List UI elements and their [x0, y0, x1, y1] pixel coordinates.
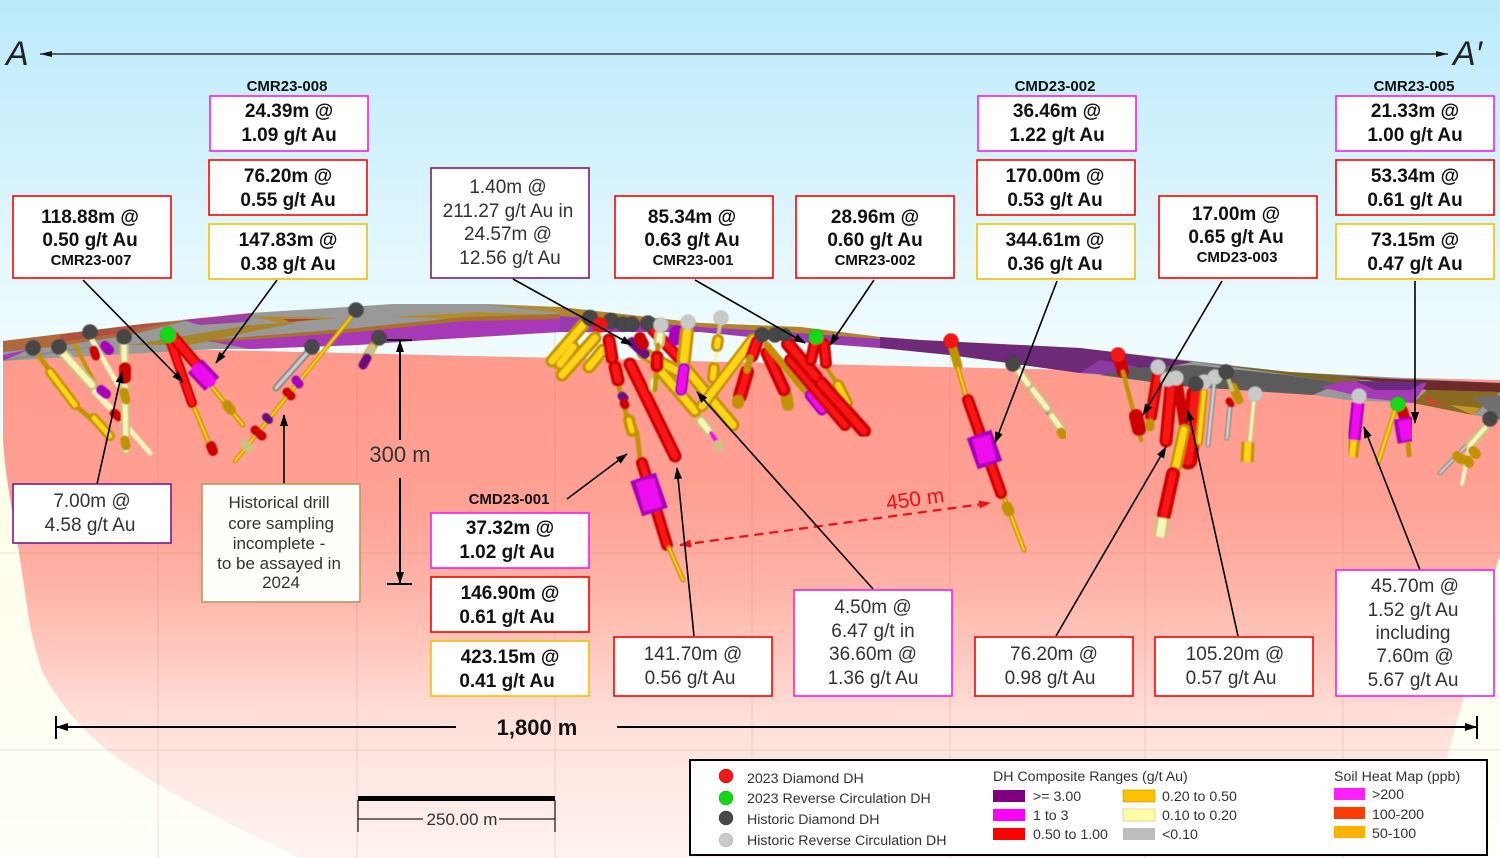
note: historical sampling: 2024	[262, 573, 300, 592]
horizontal scale: 1,800 m	[56, 715, 1477, 740]
callout group: CMR23-008: 147.83m @	[239, 230, 337, 251]
drill hole: CMD23-002	[944, 334, 1024, 550]
callout group: CMR23-008	[209, 78, 368, 279]
callout: CMR23-001	[615, 196, 773, 278]
callout: CMR23-007	[13, 196, 171, 278]
callout: 4.50m: 4.50m @	[834, 597, 912, 618]
legend: DH composite ranges: 0.20 to 0.50	[1162, 789, 1237, 805]
drill holes: CMR23-005 cluster	[1352, 388, 1409, 463]
note: historical sampling: to be assayed in	[217, 554, 341, 573]
section line A to A'	[4, 35, 1484, 73]
callout: 1.40m high grade: 211.27 g/t Au in	[443, 201, 573, 222]
callout: 45.70m: including	[1376, 623, 1450, 644]
callout: CMD23-003: 17.00m @	[1192, 204, 1280, 225]
callout group: CMR23-005: 53.34m @	[1371, 166, 1459, 187]
callout: 7.00m: 4.58 g/t Au	[45, 515, 135, 536]
callout group: CMD23-002: 36.46m @	[1013, 101, 1101, 122]
sky background	[0, 0, 1500, 435]
callout: CMR23-007: 118.88m @	[41, 207, 139, 228]
callout: 7.00m	[13, 484, 171, 543]
callout: 45.70m: 5.67 g/t Au	[1368, 670, 1458, 691]
callout group: CMR23-005: 73.15m @	[1371, 230, 1459, 251]
note: historical sampling: incomplete -	[233, 534, 325, 553]
callout group: CMD23-001: 1.02 g/t Au	[459, 542, 555, 563]
scale bar: 250.00 m: 250.00 m	[427, 810, 497, 829]
note: historical sampling	[202, 484, 360, 602]
legend: drill hole types: 2023 Diamond DH	[747, 771, 864, 787]
callout group: CMD23-002: 0.36 g/t Au	[1007, 254, 1103, 275]
drill hole: historic low-grade east of CMD23-002	[1006, 356, 1063, 435]
callout: CMR23-002: CMR23-002	[835, 252, 915, 269]
callout: CMR23-001: 0.63 g/t Au	[644, 230, 740, 251]
vertical scale: 300 m: 300 m	[369, 442, 431, 467]
callout: CMR23-001: CMR23-001	[653, 252, 733, 269]
pale outer background	[0, 435, 1500, 858]
callout group: CMR23-008: 0.55 g/t Au	[240, 190, 336, 211]
legend: drill hole types	[719, 769, 946, 849]
legend: soil heat map: 50-100	[1372, 826, 1416, 842]
callout: CMD23-003: CMD23-003	[1197, 249, 1277, 266]
callout group: CMD23-002	[977, 78, 1136, 279]
callout group: CMR23-005: CMR23-005	[1374, 78, 1454, 95]
drill holes: CMR23-007 and CMR23-008	[160, 327, 243, 451]
callout group: CMD23-001: CMD23-001	[469, 491, 549, 508]
callout: 45.70m: 45.70m @	[1371, 576, 1459, 597]
callout group: CMR23-008: 0.38 g/t Au	[240, 254, 336, 275]
callout: 105.20m: 0.57 g/t Au	[1186, 668, 1276, 689]
callout group: CMR23-008: 76.20m @	[244, 166, 332, 187]
callout: 141.70m: 0.56 g/t Au	[645, 668, 735, 689]
callout group: CMD23-002: CMD23-002	[1015, 78, 1095, 95]
callout: 141.70m: 141.70m @	[644, 644, 742, 665]
callout: 105.20m: 105.20m @	[1186, 644, 1284, 665]
callout: 45.70m	[1336, 570, 1494, 696]
callout group: CMR23-008: CMR23-008	[247, 78, 327, 95]
callout: CMR23-002: 0.60 g/t Au	[827, 230, 923, 251]
callout group: CMD23-002: 170.00m @	[1006, 166, 1104, 187]
callout group: CMR23-005: 21.33m @	[1371, 101, 1459, 122]
callout: 4.50m: 36.60m @	[829, 644, 917, 665]
legend: DH composite ranges: <0.10	[1162, 827, 1198, 843]
distance marker: 450 m	[680, 484, 990, 545]
callout: 4.50m	[794, 590, 952, 696]
legend: DH composite ranges: 0.10 to 0.20	[1162, 808, 1237, 824]
callout group: CMD23-001: 423.15m @	[461, 647, 559, 668]
callout group: CMD23-001	[431, 491, 589, 696]
distance marker: 450 m: 450 m	[885, 484, 946, 515]
callout group: CMR23-005	[1336, 78, 1494, 279]
callout: 1.40m high grade: 24.57m @	[464, 224, 552, 245]
callout: 76.20m: 0.98 g/t Au	[1005, 668, 1095, 689]
callout: 4.50m: 1.36 g/t Au	[828, 668, 918, 689]
callout group: CMR23-005: 1.00 g/t Au	[1367, 125, 1463, 146]
callout: 141.70m	[614, 637, 772, 696]
terrain surface band	[3, 304, 1500, 420]
legend: DH composite ranges: 0.50 to 1.00	[1033, 827, 1108, 843]
legend: DH composite ranges: DH Composite Ranges (g/t Au)	[993, 769, 1188, 785]
drill holes: CMR23-001 and CMR23-002 area	[702, 328, 864, 431]
callout: 1.40m high grade	[431, 168, 589, 278]
callout: CMD23-003: 0.65 g/t Au	[1188, 227, 1284, 248]
callout group: CMD23-001: 0.61 g/t Au	[459, 607, 555, 628]
callout group: CMD23-002: 0.53 g/t Au	[1007, 190, 1103, 211]
callout group: CMR23-008: 24.39m @	[245, 101, 333, 122]
callout: CMR23-001: 85.34m @	[648, 207, 736, 228]
drill holes: CMD23-003 cluster	[1110, 348, 1262, 537]
legend: DH composite ranges	[993, 769, 1237, 843]
vertical scale: 300 m	[369, 340, 431, 584]
callout group: CMD23-002: 1.22 g/t Au	[1009, 125, 1105, 146]
legend: drill hole types: 2023 Reverse Circulation DH	[747, 791, 931, 807]
callout arrows	[83, 279, 1420, 636]
drill holes: far-east cluster	[1440, 412, 1498, 484]
drill holes: central cluster	[552, 310, 733, 580]
section line A to A': A′	[1451, 35, 1484, 73]
note: historical sampling: Historical drill	[228, 493, 330, 512]
note: historical sampling: core sampling	[228, 514, 334, 533]
legend: soil heat map: 100-200	[1372, 807, 1424, 823]
section line A to A': A	[4, 35, 29, 73]
legend: drill hole types: Historic Diamond DH	[747, 812, 879, 828]
callout: CMD23-003	[1159, 196, 1317, 278]
callout group: CMR23-005: 0.61 g/t Au	[1367, 190, 1463, 211]
callout: 45.70m: 1.52 g/t Au	[1368, 600, 1458, 621]
callout group: CMR23-005: 0.47 g/t Au	[1367, 254, 1463, 275]
callout group: CMD23-001: 37.32m @	[466, 518, 554, 539]
callout group: CMD23-002: 344.61m @	[1006, 230, 1104, 251]
legend: soil heat map: >200	[1372, 787, 1404, 803]
callout: CMR23-007: CMR23-007	[51, 252, 131, 269]
pink subsurface block	[3, 345, 1500, 858]
callout: 76.20m: 76.20m @	[1010, 644, 1098, 665]
legend panel	[690, 760, 1487, 855]
callout: CMR23-002: 28.96m @	[831, 207, 919, 228]
callout: 1.40m high grade: 12.56 g/t Au	[459, 248, 561, 269]
legend: drill hole types: Historic Reverse Circulation DH	[747, 833, 946, 849]
callout: 105.20m	[1155, 637, 1313, 696]
callout: 4.50m: 6.47 g/t in	[831, 621, 915, 642]
legend: soil heat map: Soil Heat Map (ppb)	[1334, 769, 1460, 785]
callout group: CMD23-001: 146.90m @	[461, 583, 559, 604]
scale bar: 250.00 m	[358, 796, 555, 832]
drill holes: far-left cluster	[26, 324, 150, 453]
legend: DH composite ranges: 1 to 3	[1033, 808, 1069, 824]
callout: 45.70m: 7.60m @	[1376, 646, 1454, 667]
legend: soil heat map	[1334, 769, 1460, 842]
callout: 7.00m: 7.00m @	[53, 491, 131, 512]
callout: 1.40m high grade: 1.40m @	[469, 177, 547, 198]
legend: DH composite ranges: >= 3.00	[1033, 789, 1081, 805]
callout group: CMD23-001: 0.41 g/t Au	[459, 671, 555, 692]
callout group: CMR23-008: 1.09 g/t Au	[241, 125, 337, 146]
callout: CMR23-002	[796, 196, 954, 278]
drill holes: historical incomplete sampling	[235, 302, 386, 461]
horizontal scale: 1,800 m: 1,800 m	[497, 715, 577, 740]
callout: 76.20m	[975, 637, 1133, 696]
callout: CMR23-007: 0.50 g/t Au	[42, 230, 138, 251]
